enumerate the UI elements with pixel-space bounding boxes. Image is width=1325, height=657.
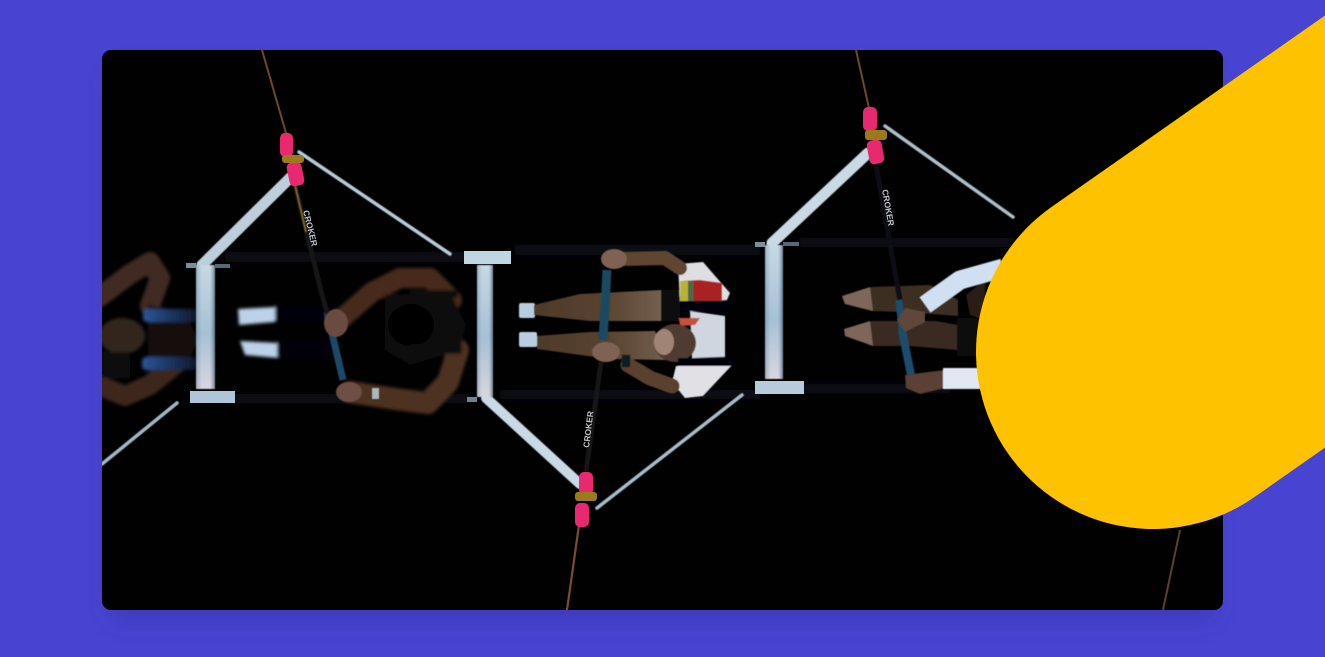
- rower 4: behind the yellow shape: [842, 280, 985, 356]
- oar shafts: [295, 165, 911, 472]
- oar lettering: CROKER: [880, 189, 896, 227]
- oar lettering: CROKER: [301, 209, 320, 247]
- photo dark background: [102, 50, 1223, 610]
- oar lettering: CROKER: [581, 410, 595, 448]
- yellow rounded diagonal shape: [1153, 39, 1325, 352]
- boat hull: [225, 238, 1015, 403]
- brass oar locks: [282, 130, 887, 501]
- rigger arms: [102, 126, 1013, 508]
- photo drop shadow: [110, 70, 1215, 620]
- oar lettering: [301, 189, 896, 448]
- rower 1: far left: [98, 262, 198, 396]
- pink oar collars: [280, 107, 885, 527]
- vertical rigger bars: [196, 245, 783, 397]
- oar blades and outer shafts: [262, 50, 1180, 610]
- hands and sleeves over oars: [324, 249, 1003, 402]
- rower 2: second seat: [238, 278, 466, 403]
- rigger plates: [190, 391, 235, 403]
- riggers: [102, 126, 1013, 508]
- rower 3: centre, white and rainbow top: [519, 258, 735, 398]
- panel: rowing photo: [98, 50, 1223, 610]
